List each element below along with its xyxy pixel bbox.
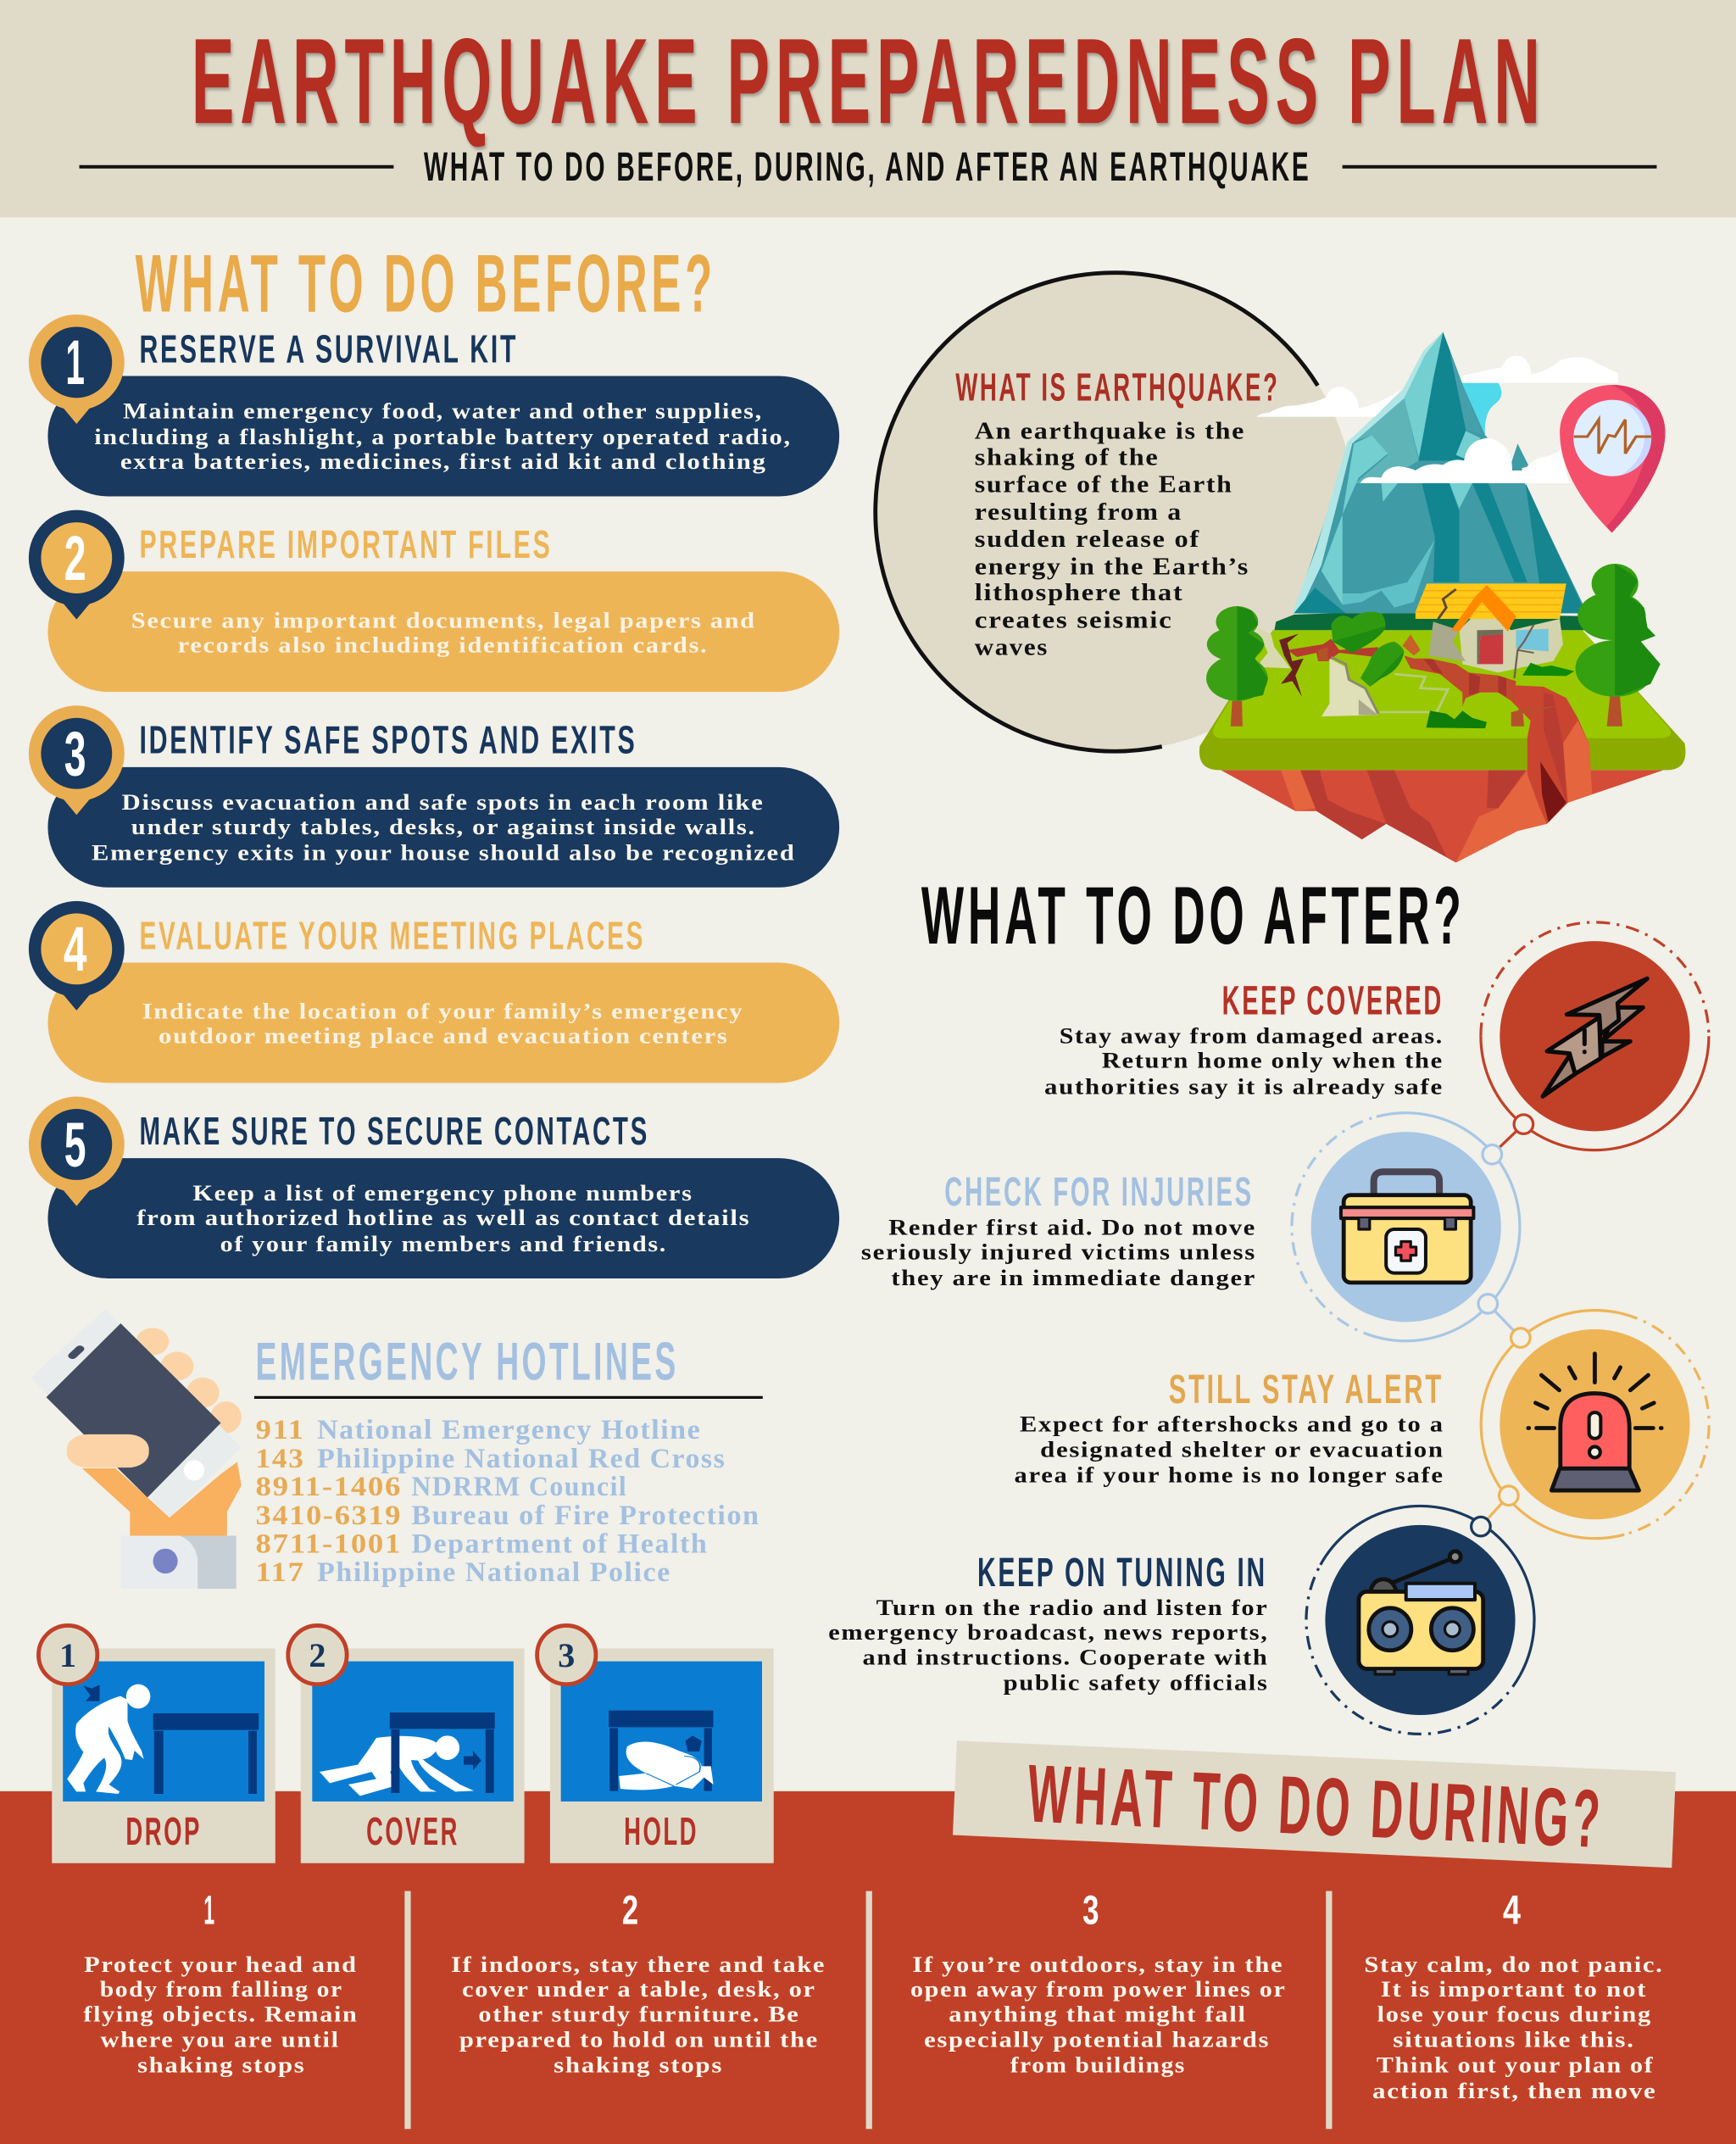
alert text bbox=[1015, 1412, 1444, 1487]
hotline list: Department of Health bbox=[411, 1529, 708, 1559]
hotline list: Philippine National Red Cross bbox=[317, 1443, 726, 1473]
after 3: still stay alert bbox=[1015, 1311, 1709, 1539]
hotline list: Philippine National Police bbox=[317, 1556, 671, 1587]
alert text: area if your home is no longer safe bbox=[1015, 1462, 1444, 1487]
hotline list: 911 bbox=[256, 1414, 305, 1445]
step 4 text: outdoor meeting place and evacuation centers bbox=[159, 1023, 729, 1049]
column 3 text: anything that might fall bbox=[949, 2002, 1247, 2027]
cover label: COVER bbox=[366, 1809, 459, 1853]
step 2 heading: PREPARE IMPORTANT FILES bbox=[139, 522, 552, 566]
injuries text: seriously injured victims unless bbox=[861, 1239, 1256, 1264]
location pin bbox=[1560, 385, 1665, 532]
bushes bbox=[1331, 612, 1574, 728]
alert text: Expect for aftershocks and go to a bbox=[1020, 1412, 1444, 1437]
card: drop bbox=[38, 1625, 275, 1863]
step 5 heading: MAKE SURE TO SECURE CONTACTS bbox=[139, 1109, 649, 1153]
panel: emergency hotlines bbox=[254, 1332, 763, 1587]
column 1 text bbox=[83, 1952, 359, 2077]
clouds bbox=[1256, 355, 1618, 483]
column 2 text: shaking stops bbox=[554, 2052, 723, 2077]
keep covered heading: KEEP COVERED bbox=[1222, 978, 1444, 1024]
hold figure bbox=[609, 1711, 714, 1791]
keep covered ring bbox=[1481, 922, 1709, 1150]
step 5 badge: 5 bbox=[64, 1110, 86, 1180]
injuries text: they are in immediate danger bbox=[891, 1265, 1256, 1290]
number 4: 4 bbox=[1503, 1887, 1521, 1933]
badge 2 bbox=[288, 1625, 347, 1685]
step 4 badge: 4 bbox=[64, 914, 86, 984]
during column 2 bbox=[451, 1887, 826, 2077]
column 3 text: especially potential hazards bbox=[924, 2026, 1270, 2052]
broken monument bbox=[1321, 657, 1378, 716]
column 1 text: body from falling or bbox=[100, 1976, 343, 2002]
icon: radio bbox=[1359, 1551, 1483, 1674]
hold label: HOLD bbox=[624, 1809, 698, 1853]
during column 3 bbox=[910, 1887, 1286, 2077]
step 3 badge bbox=[29, 705, 125, 815]
column 4 text bbox=[1364, 1952, 1664, 2103]
keep covered text: Stay away from damaged areas. bbox=[1060, 1023, 1444, 1049]
column 4 text: Think out your plan of bbox=[1377, 2052, 1654, 2077]
mountain bbox=[1292, 332, 1588, 613]
left ground crack bbox=[1279, 633, 1378, 697]
node: injuries top bbox=[1483, 1144, 1502, 1164]
step 1 badge bbox=[29, 315, 125, 424]
broken wall left bbox=[1256, 627, 1291, 668]
tuning text bbox=[828, 1595, 1268, 1696]
definition text: creates seismic bbox=[975, 607, 1173, 633]
step 3 text: Discuss evacuation and safe spots in each room like bbox=[122, 789, 764, 815]
step 3 text bbox=[92, 789, 796, 866]
step 3 badge: 3 bbox=[64, 718, 86, 789]
alert ring bbox=[1481, 1311, 1709, 1539]
cover figure bbox=[320, 1712, 495, 1796]
column 4 text: Stay calm, do not panic. bbox=[1364, 1952, 1664, 1977]
node: alert top bbox=[1511, 1328, 1530, 1347]
hotline list: 8911-1406 bbox=[256, 1471, 402, 1501]
column 3 text: If you’re outdoors, stay in the bbox=[912, 1952, 1283, 1977]
step 1 heading: RESERVE A SURVIVAL KIT bbox=[139, 326, 518, 370]
step 2 badge bbox=[29, 510, 125, 620]
walking path bbox=[1380, 674, 1448, 712]
tuning heading: KEEP ON TUNING IN bbox=[977, 1550, 1267, 1595]
step 3 heading: IDENTIFY SAFE SPOTS AND EXITS bbox=[139, 718, 637, 762]
step 5 text: Keep a list of emergency phone numbers bbox=[192, 1180, 693, 1206]
definition text: waves bbox=[975, 635, 1049, 661]
icon: cracked ground bbox=[1543, 978, 1647, 1096]
step 5 text bbox=[136, 1180, 750, 1256]
step 1 text: including a flashlight, a portable battery operated radio, bbox=[94, 424, 792, 449]
column 4 text: lose your focus during bbox=[1377, 2002, 1652, 2027]
step 1 text: Maintain emergency food, water and other supplies, bbox=[123, 398, 763, 424]
node: alert bottom bbox=[1500, 1486, 1518, 1505]
definition text: lithosphere that bbox=[975, 580, 1184, 606]
badge 3 bbox=[537, 1625, 596, 1685]
step 2 text bbox=[131, 607, 756, 657]
badge 2: 2 bbox=[309, 1636, 326, 1674]
badge 1: 1 bbox=[59, 1636, 76, 1674]
left tree bbox=[1206, 606, 1268, 727]
step 5: make sure to secure contacts bbox=[29, 1097, 839, 1278]
column 1 text: shaking stops bbox=[137, 2052, 305, 2077]
column 4 text: situations like this. bbox=[1393, 2026, 1635, 2052]
step 2 text: records also including identification cards. bbox=[178, 632, 708, 657]
connector: covered to injuries bbox=[1492, 1124, 1523, 1155]
tuning text: Turn on the radio and listen for bbox=[876, 1595, 1268, 1620]
column 2 text: prepared to hold on until the bbox=[459, 2026, 819, 2052]
definition text bbox=[975, 419, 1249, 661]
step 5 text: of your family members and friends. bbox=[220, 1231, 667, 1256]
hotline list: 117 bbox=[256, 1556, 305, 1587]
node: injuries bottom bbox=[1478, 1295, 1498, 1313]
hotline list: 3410-6319 bbox=[256, 1500, 402, 1530]
illustration: floating island with mountain and cracked house bbox=[1199, 332, 1685, 862]
after 2: check for injuries bbox=[861, 1113, 1520, 1341]
keep covered text bbox=[1044, 1023, 1444, 1099]
step 2: prepare important files bbox=[29, 510, 839, 692]
banner: what to do during bbox=[953, 1740, 1676, 1868]
step 3 text: Emergency exits in your house should also be recognized bbox=[92, 840, 796, 866]
column dividers bbox=[404, 1891, 1332, 2129]
circle heading: WHAT IS EARTHQUAKE? bbox=[955, 365, 1279, 409]
definition text: shaking of the bbox=[975, 444, 1159, 471]
tuning ring bbox=[1306, 1506, 1534, 1734]
step 1 text: extra batteries, medicines, first aid kit and clothing bbox=[120, 448, 767, 474]
card: hold bbox=[537, 1625, 774, 1863]
during column 4 bbox=[1364, 1887, 1664, 2103]
step 4 text: Indicate the location of your family’s emergency bbox=[142, 999, 743, 1024]
step 4 text bbox=[142, 999, 743, 1049]
step 4 heading: EVALUATE YOUR MEETING PLACES bbox=[139, 913, 645, 957]
alert heading: STILL STAY ALERT bbox=[1169, 1367, 1444, 1412]
step 1 badge: 1 bbox=[65, 327, 85, 398]
badge 1 bbox=[38, 1625, 97, 1685]
drop figure bbox=[67, 1685, 259, 1794]
injuries text bbox=[861, 1214, 1256, 1290]
step 2 badge: 2 bbox=[64, 523, 86, 593]
hotline list bbox=[256, 1414, 760, 1587]
number 3: 3 bbox=[1082, 1887, 1099, 1933]
drop label: DROP bbox=[125, 1809, 202, 1853]
column 2 text: cover under a table, desk, or bbox=[462, 1976, 816, 2002]
hotline list: 143 bbox=[256, 1443, 305, 1473]
step 5 text: from authorized hotline as well as contact details bbox=[136, 1205, 750, 1230]
during column 1 bbox=[83, 1887, 359, 2077]
heading: what to do before: WHAT TO DO BEFORE? bbox=[136, 237, 716, 330]
tuning text: public safety officials bbox=[1004, 1670, 1268, 1696]
step 5 badge bbox=[29, 1097, 125, 1206]
connector: injuries to alert bbox=[1488, 1304, 1521, 1338]
red bottom band bbox=[0, 1791, 1736, 2144]
node: covered ring bbox=[1514, 1115, 1533, 1133]
after 1: keep covered bbox=[1044, 922, 1709, 1150]
during column 1: 1 bbox=[203, 1887, 214, 1933]
hotline list: Bureau of Fire Protection bbox=[411, 1500, 760, 1530]
keep covered text: authorities say it is already safe bbox=[1044, 1073, 1444, 1099]
injuries ring bbox=[1292, 1113, 1520, 1341]
definition text: energy in the Earth’s bbox=[975, 554, 1249, 580]
column 4 text: It is important to not bbox=[1381, 1976, 1647, 2002]
step 4 badge bbox=[29, 901, 125, 1011]
step 3: identify safe spots and exits bbox=[29, 705, 839, 888]
hotline list: National Emergency Hotline bbox=[317, 1414, 701, 1445]
icon: first aid kit bbox=[1341, 1172, 1473, 1283]
island rock base bbox=[1221, 770, 1664, 862]
house bbox=[1416, 583, 1566, 678]
column 1 text: flying objects. Remain bbox=[83, 2002, 359, 2027]
badge 3: 3 bbox=[558, 1636, 575, 1674]
grass platform bbox=[1199, 630, 1685, 770]
column 3 text: from buildings bbox=[1010, 2052, 1186, 2077]
icon: hand holding phone bbox=[31, 1310, 242, 1589]
injuries heading: CHECK FOR INJURIES bbox=[944, 1169, 1254, 1215]
step 1: reserve a survival kit bbox=[29, 315, 839, 496]
column 2 text bbox=[451, 1952, 826, 2077]
column 3 text: open away from power lines or bbox=[910, 1976, 1286, 2002]
step 2 text: Secure any important documents, legal papers and bbox=[131, 607, 756, 632]
injuries text: Render first aid. Do not move bbox=[888, 1214, 1256, 1239]
column 4 text: action first, then move bbox=[1372, 2078, 1656, 2103]
right tree bbox=[1575, 564, 1661, 727]
tree line bbox=[1274, 613, 1586, 630]
step 3 text: under sturdy tables, desks, or against inside walls. bbox=[131, 814, 756, 839]
after 4: keep on tuning in bbox=[828, 1506, 1534, 1734]
alert text: designated shelter or evacuation bbox=[1040, 1437, 1444, 1462]
definition text: sudden release of bbox=[975, 526, 1200, 553]
definition text: resulting from a bbox=[975, 499, 1182, 526]
header band bbox=[0, 0, 1736, 217]
number 2: 2 bbox=[622, 1887, 638, 1933]
definition text: An earthquake is the bbox=[975, 419, 1245, 445]
fallen post bbox=[1318, 647, 1560, 727]
column 1 text: Protect your head and bbox=[84, 1952, 358, 1977]
chasm bbox=[1404, 655, 1592, 824]
hotline list: NDRRM Council bbox=[411, 1471, 627, 1501]
column 1 text: where you are until bbox=[101, 2026, 340, 2052]
step 1 text bbox=[94, 398, 792, 474]
connector: alert to radio bbox=[1481, 1495, 1509, 1527]
column 3 text bbox=[910, 1952, 1286, 2077]
definition text: surface of the Earth bbox=[975, 472, 1233, 498]
column 2 text: other sturdy furniture. Be bbox=[478, 2002, 799, 2027]
keep covered text: Return home only when the bbox=[1102, 1048, 1444, 1073]
hotlines heading: EMERGENCY HOTLINES bbox=[256, 1332, 679, 1391]
panel: what is earthquake circle bbox=[876, 272, 1355, 751]
step 4: evaluate your meeting places bbox=[29, 901, 839, 1083]
node: radio top bbox=[1472, 1517, 1490, 1536]
column 2 text: If indoors, stay there and take bbox=[451, 1952, 826, 1977]
icon: alarm siren bbox=[1528, 1354, 1661, 1490]
hotline list: 8711-1001 bbox=[256, 1529, 402, 1559]
card: cover bbox=[288, 1625, 525, 1863]
tuning text: and instructions. Cooperate with bbox=[863, 1645, 1268, 1670]
tuning text: emergency broadcast, news reports, bbox=[828, 1619, 1268, 1645]
